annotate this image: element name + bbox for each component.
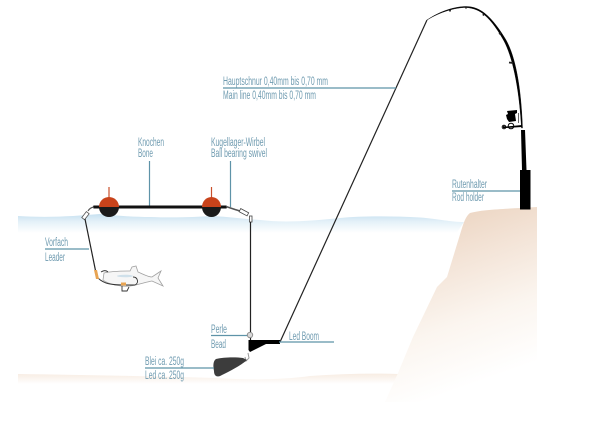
label: main line: Main line 0,40mm bis 0,70 mm: [223, 90, 316, 102]
main line: [280, 20, 427, 342]
lead weight: [213, 357, 247, 376]
label: ball bearing swivel: [211, 137, 267, 207]
label: lead weight: Blei ca. 250g: [145, 356, 184, 368]
label: bead: [211, 324, 247, 351]
swivel right: [226, 206, 252, 222]
label: rod holder: Rutenhalter: [452, 179, 487, 191]
label: bead: Bead: [211, 339, 226, 351]
weight connector: [245, 353, 249, 361]
label: rod holder: Rod holder: [452, 192, 484, 204]
fishing rod: [427, 6, 526, 170]
label: rod holder: [452, 179, 520, 204]
bone bar with floats: [93, 187, 227, 217]
swivel left: [82, 207, 94, 220]
label: main line: Hauptschnur 0,40mm bis 0,70 mm: [223, 76, 328, 88]
lake bottom sand: [18, 374, 398, 386]
label: led boom: Led Boom: [289, 331, 319, 343]
label: leader: Vorfach: [45, 237, 68, 249]
label: bone: [138, 137, 164, 206]
bead: [247, 332, 253, 338]
bait fish: [94, 266, 163, 291]
label: leader: [45, 237, 89, 264]
label: bead: Perle: [211, 324, 227, 336]
label: ball bearing swivel: Ball bearing swivel: [211, 148, 267, 160]
label: ball bearing swivel: Kugellager-Wirbel: [211, 137, 265, 149]
rod guides: [450, 7, 513, 63]
leader line: [85, 219, 96, 273]
shore bank: [385, 207, 537, 402]
label: bone: Knochen: [138, 137, 164, 149]
float right: [202, 187, 221, 217]
rod grip: [521, 130, 526, 170]
float left: [99, 187, 119, 217]
vertical line to bead: [250, 222, 252, 342]
label: leader: Leader: [45, 252, 65, 264]
label: lead weight: Led ca. 250g: [145, 370, 184, 382]
label: bone: Bone: [138, 148, 153, 160]
lead boom: [248, 340, 280, 352]
label: lead weight: [145, 356, 214, 382]
reel: [502, 110, 522, 129]
label: main line: [223, 76, 396, 102]
water surface: [18, 214, 464, 234]
rod holder: [520, 170, 530, 210]
